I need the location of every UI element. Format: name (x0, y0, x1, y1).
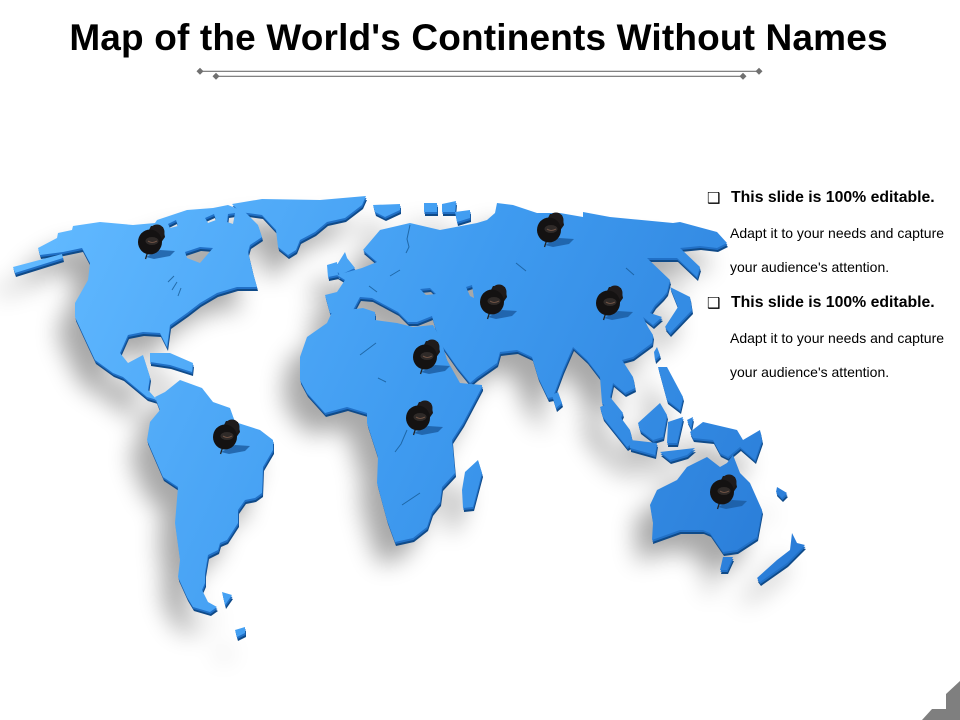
island: Greenland (232, 196, 366, 255)
text block 2 (707, 294, 944, 380)
pin: Central Africa (406, 400, 443, 435)
body line 3: Adapt it to your needs and capture (730, 330, 944, 346)
pin: Australia (710, 474, 747, 509)
islands: Britain, Iceland, Arctic, Japan (327, 201, 692, 408)
island: New Guinea (690, 422, 762, 460)
continent: Australia (650, 455, 762, 552)
title underline ornament (196, 68, 762, 80)
title: Map of the World's Continents Without Names (69, 17, 888, 58)
pin: North Africa (413, 340, 450, 374)
continent: Africa (300, 308, 482, 542)
continent: South America (147, 380, 273, 612)
map ground shadow (0, 218, 789, 659)
pin: North America (138, 224, 175, 259)
body line 4: your audience's attention. (730, 364, 889, 380)
pin: Russia (537, 212, 574, 247)
map surface creases (168, 225, 634, 505)
island: Madagascar (462, 460, 482, 508)
text block 1 (707, 189, 944, 275)
heading 1: This slide is 100% editable. (731, 189, 935, 206)
continent: North America (13, 205, 262, 400)
bullet 1: ❑ (707, 189, 720, 207)
map extrusion dark edge (14, 200, 806, 641)
islands: Caribbean (150, 353, 193, 372)
islands: Oceania (720, 487, 805, 582)
heading 2: This slide is 100% editable. (731, 294, 935, 311)
corner page-turn mark (922, 681, 960, 720)
world map (0, 196, 806, 659)
map extrusion mid edge (14, 198, 806, 639)
continent: Eurasia (325, 203, 727, 420)
islands: Southeast Asia (600, 367, 695, 460)
islands: South Atlantic (222, 592, 245, 637)
bullet 2: ❑ (707, 294, 720, 312)
body line 2: your audience's attention. (730, 259, 889, 275)
pin: South America (213, 420, 250, 454)
pin: Central Asia (480, 284, 517, 319)
pin: China (596, 286, 633, 320)
body line 1: Adapt it to your needs and capture (730, 225, 944, 241)
